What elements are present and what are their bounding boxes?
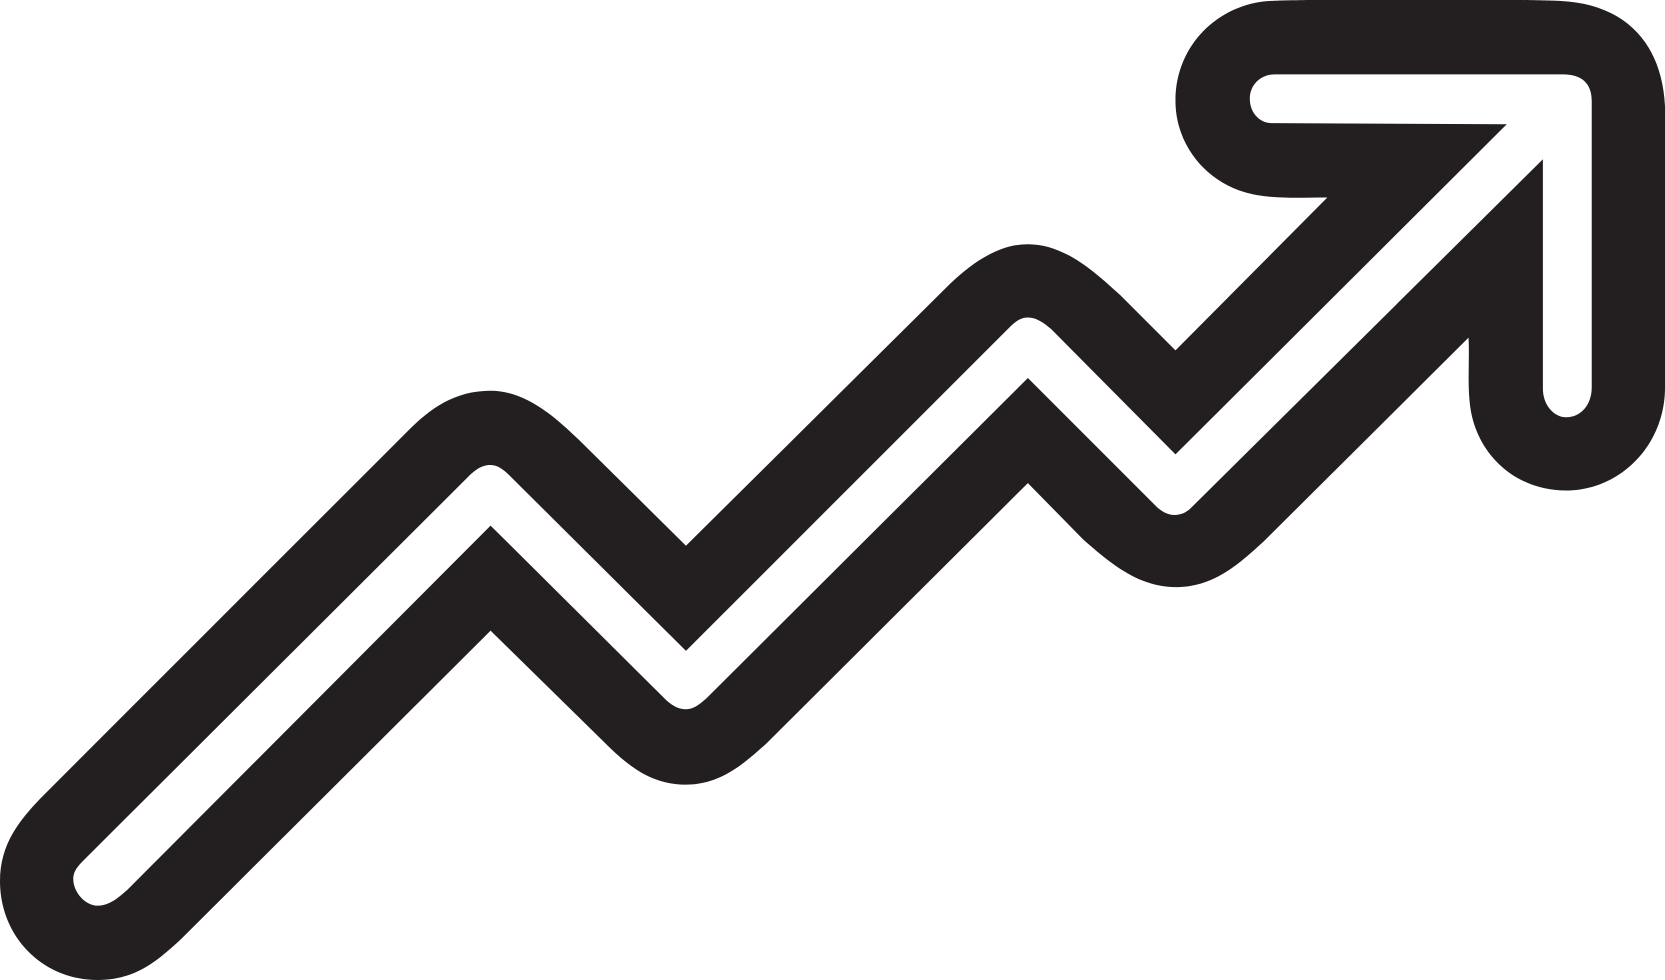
arrow inner white channel [73,74,1592,906]
